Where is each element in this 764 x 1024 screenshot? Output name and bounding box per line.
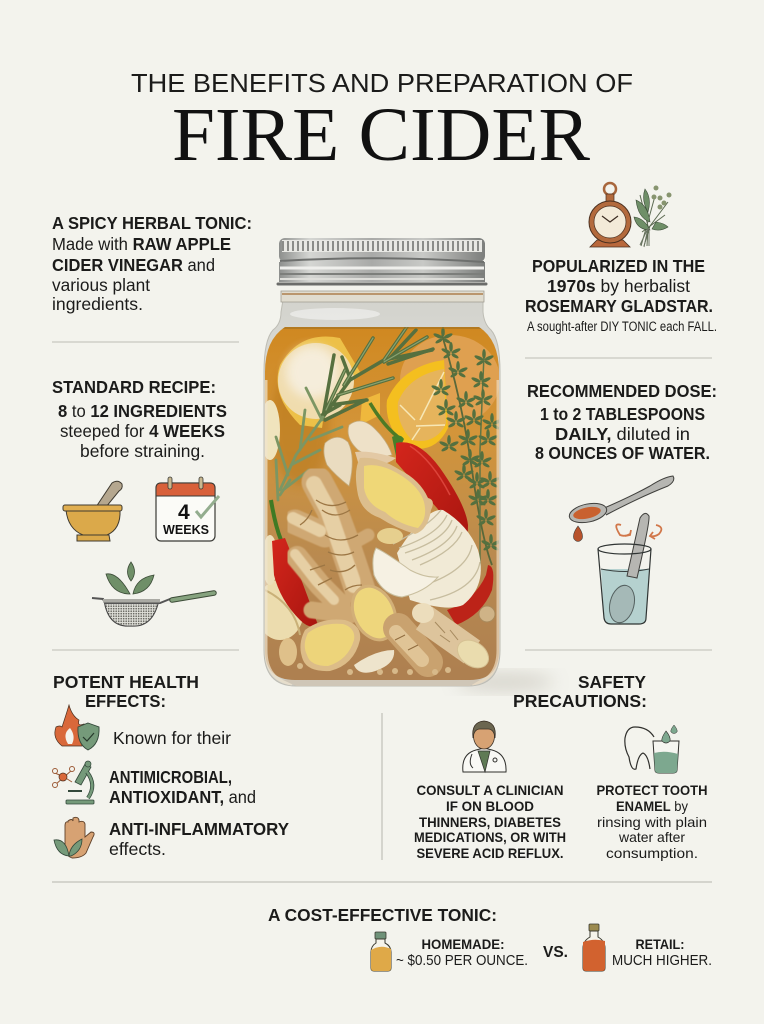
text block: a spicy herbal tonic bbox=[52, 213, 252, 314]
icon: 4 weeks calendar: 4 bbox=[178, 501, 190, 524]
text block: a spicy herbal tonic: ingredients. bbox=[52, 294, 143, 314]
text: retail price bbox=[612, 936, 712, 969]
small root pieces bbox=[279, 606, 495, 673]
text block: popularized: POPULARIZED IN THE bbox=[532, 256, 705, 276]
text: anti-inflammatory: effects. bbox=[109, 839, 166, 859]
icon: strainer with herbs bbox=[92, 562, 214, 626]
ginger cut end bbox=[351, 586, 396, 642]
illustration: fire cider jar bbox=[256, 238, 505, 686]
thyme sprigs bbox=[431, 327, 502, 570]
heading: safety precautions bbox=[513, 672, 647, 711]
lemon wedge bbox=[387, 360, 448, 449]
icon: retail large bottle bbox=[583, 924, 605, 971]
icon: glass of water with spoon bbox=[598, 513, 651, 625]
icon: 4 weeks calendar: WEEKS bbox=[163, 523, 209, 537]
text: protect tooth enamel: consumption. bbox=[606, 845, 698, 861]
text block: recommended dose bbox=[527, 381, 717, 463]
ginger stick middle bbox=[395, 628, 428, 662]
text: homemade price: HOMEMADE: bbox=[422, 936, 504, 952]
title: THE BENEFITS AND PREPARATION OF bbox=[131, 68, 633, 98]
text block: recommended dose: RECOMMENDED DOSE: bbox=[527, 381, 717, 401]
heading: potent health effects bbox=[53, 672, 199, 711]
neck rings bbox=[281, 291, 484, 302]
icon: molecule and microscope bbox=[52, 761, 94, 804]
text block: popularized: 1970s by herbalist bbox=[547, 276, 690, 296]
text block: a spicy herbal tonic: A SPICY HERBAL TONIC: bbox=[52, 213, 252, 233]
text block: a spicy herbal tonic: various plant bbox=[52, 275, 150, 295]
text: vs: VS. bbox=[543, 944, 568, 961]
text block: standard recipe: steeped for 4 WEEKS bbox=[60, 421, 225, 441]
icon: stir arrows bbox=[616, 524, 661, 539]
text: protect tooth enamel: water after bbox=[618, 829, 685, 845]
icon: tooth and rinse glass bbox=[625, 725, 679, 773]
text: antimicrobial bbox=[109, 767, 256, 807]
pale onion left bbox=[265, 580, 302, 640]
icon: flame and shield bbox=[55, 705, 99, 750]
ginger slice bottom bbox=[300, 619, 360, 671]
garlic cloves bbox=[324, 421, 396, 486]
text: protect tooth enamel: rinsing with plain bbox=[597, 814, 707, 830]
text block: standard recipe: before straining. bbox=[80, 441, 205, 461]
icon: hand with leaves bbox=[54, 817, 94, 858]
sediment bbox=[297, 663, 451, 675]
text block: popularized: A sought-after DIY TONIC each FALL. bbox=[527, 319, 717, 334]
text: antimicrobial: ANTIOXIDANT, and bbox=[109, 787, 256, 807]
text block: recommended dose: DAILY, diluted in bbox=[555, 424, 690, 444]
text: protect tooth enamel bbox=[596, 782, 708, 861]
text block: popularized bbox=[525, 256, 717, 334]
liquid and contents bbox=[256, 318, 505, 685]
text: anti-inflammatory: ANTI-INFLAMMATORY bbox=[109, 819, 289, 839]
text: consult a clinician: IF ON BLOOD bbox=[446, 798, 534, 814]
title bbox=[131, 68, 633, 177]
ginger stick right bbox=[412, 603, 489, 668]
glass highlights bbox=[266, 380, 292, 684]
text: protect tooth enamel: PROTECT TOOTH bbox=[596, 782, 708, 798]
rosemary sprigs bbox=[276, 318, 433, 500]
text block: recommended dose: 8 OUNCES OF WATER. bbox=[535, 443, 710, 463]
icon: tablespoon with drop bbox=[568, 476, 674, 542]
pale lemon bbox=[278, 337, 360, 428]
text: homemade price bbox=[396, 936, 528, 969]
chili right bbox=[370, 403, 468, 546]
text: retail price: MUCH HIGHER. bbox=[612, 953, 712, 969]
heading: safety precautions: PRECAUTIONS: bbox=[513, 691, 647, 711]
glass body bbox=[264, 300, 500, 686]
text: anti-inflammatory bbox=[109, 819, 289, 859]
icon: 4 weeks calendar bbox=[156, 477, 219, 541]
ginger root ridges bbox=[300, 500, 362, 590]
text block: a spicy herbal tonic: Made with RAW APPLE bbox=[52, 234, 231, 254]
text: consult a clinician: SEVERE ACID REFLUX. bbox=[416, 845, 564, 861]
metal lid bbox=[278, 238, 486, 284]
text: consult a clinician: CONSULT A CLINICIAN bbox=[416, 782, 564, 798]
onion fan bbox=[373, 510, 481, 608]
title: FIRE CIDER bbox=[172, 93, 590, 177]
text block: standard recipe: 8 to 12 INGREDIENTS bbox=[58, 401, 227, 421]
text block: popularized: ROSEMARY GLADSTAR. bbox=[525, 296, 713, 316]
icon: mortar and pestle bbox=[63, 481, 122, 541]
text block: standard recipe bbox=[52, 377, 227, 461]
text block: recommended dose: 1 to 2 TABLESPOONS bbox=[540, 404, 705, 424]
text: consult a clinician: MEDICATIONS, OR WITH bbox=[414, 829, 566, 845]
icon: pocket watch clock bbox=[589, 183, 631, 247]
chili left bbox=[271, 500, 318, 627]
heading: a cost-effective tonic: A COST-EFFECTIVE TONIC: bbox=[268, 905, 497, 925]
chili lower right bbox=[447, 565, 493, 625]
text block: standard recipe: STANDARD RECIPE: bbox=[52, 377, 216, 397]
text: consult a clinician bbox=[414, 782, 566, 861]
text: antimicrobial: ANTIMICROBIAL, bbox=[109, 767, 232, 787]
icon: herb bundle bbox=[634, 186, 672, 247]
text: protect tooth enamel: ENAMEL by bbox=[616, 798, 688, 814]
heading: safety precautions: SAFETY bbox=[578, 672, 646, 692]
text: homemade price: ~ $0.50 PER OUNCE. bbox=[396, 953, 528, 969]
text: known for their: Known for their bbox=[113, 728, 231, 748]
ginger slice top bbox=[356, 458, 433, 544]
ginger root bbox=[295, 482, 368, 615]
text: retail price: RETAIL: bbox=[636, 936, 684, 952]
jar shadow bbox=[455, 675, 555, 689]
icon: homemade small bottle bbox=[371, 932, 391, 971]
heading: potent health effects: POTENT HEALTH bbox=[53, 672, 199, 692]
heading: potent health effects: EFFECTS: bbox=[85, 691, 166, 711]
text: consult a clinician: THINNERS, DIABETES bbox=[419, 814, 561, 830]
icon: doctor bbox=[463, 721, 506, 772]
text block: a spicy herbal tonic: CIDER VINEGAR and bbox=[52, 255, 215, 275]
ginger highlights bbox=[293, 484, 354, 600]
